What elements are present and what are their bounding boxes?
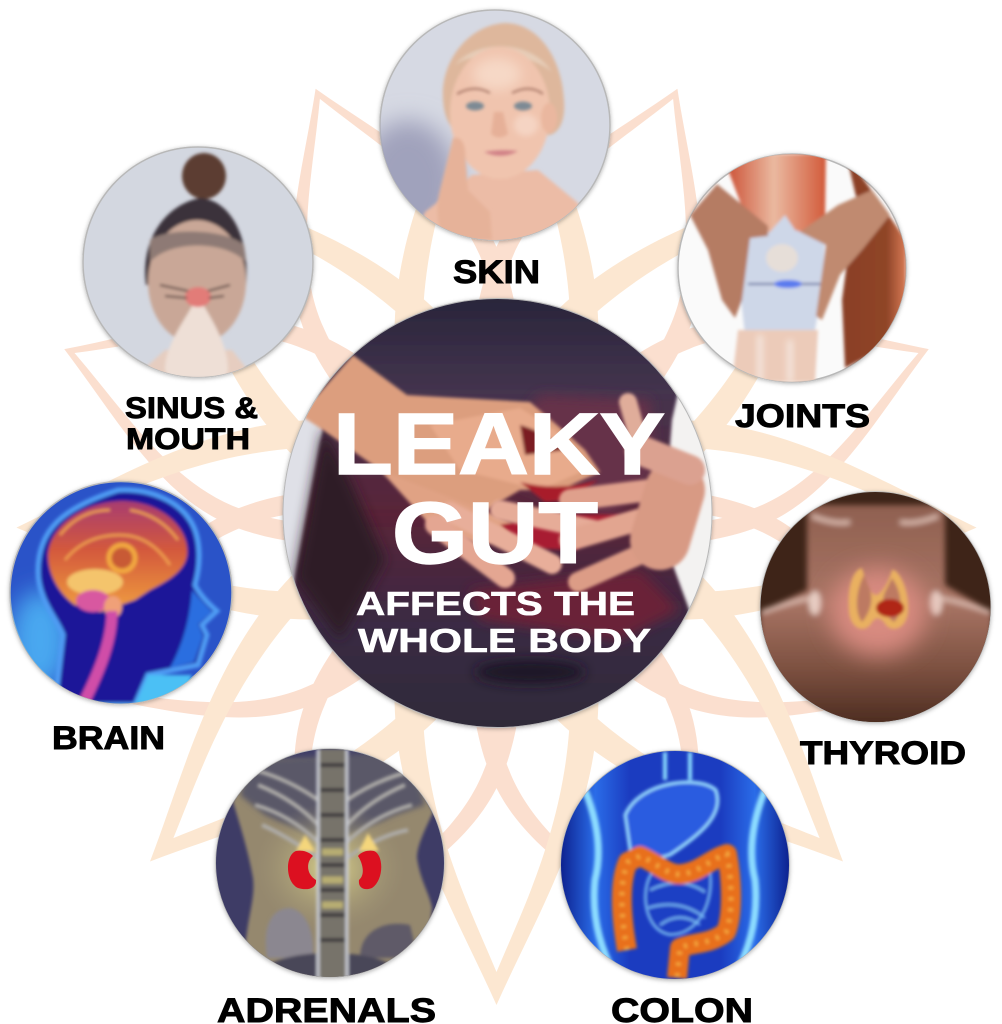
label: sinus and mouth: SINUS & bbox=[125, 392, 258, 425]
heading: leaky gut: LEAKY bbox=[333, 396, 665, 493]
panel: sinus and mouth photo bbox=[83, 147, 313, 378]
panel: brain photo bbox=[10, 482, 232, 705]
label: brain: BRAIN bbox=[52, 720, 165, 756]
panel: central leaky gut photo bbox=[280, 295, 720, 735]
panel: adrenals photo bbox=[216, 749, 444, 997]
heading: leaky gut bbox=[333, 396, 665, 582]
subheading: affects the whole body: WHOLE BODY bbox=[358, 622, 651, 659]
label: thyroid: THYROID bbox=[800, 735, 966, 771]
label: skin: SKIN bbox=[453, 254, 540, 290]
panel: colon photo bbox=[561, 751, 789, 979]
label: joints: JOINTS bbox=[735, 398, 870, 434]
heading: leaky gut: GUT bbox=[392, 485, 598, 582]
subheading: affects the whole body: AFFECTS THE bbox=[356, 585, 635, 622]
panel: joints photo bbox=[678, 154, 906, 382]
label: sinus and mouth: MOUTH bbox=[126, 423, 250, 456]
subheading: affects the whole body bbox=[356, 585, 651, 659]
panel: thyroid photo bbox=[760, 490, 992, 724]
panel: skin photo bbox=[358, 10, 610, 250]
label: sinus and mouth bbox=[125, 392, 258, 456]
